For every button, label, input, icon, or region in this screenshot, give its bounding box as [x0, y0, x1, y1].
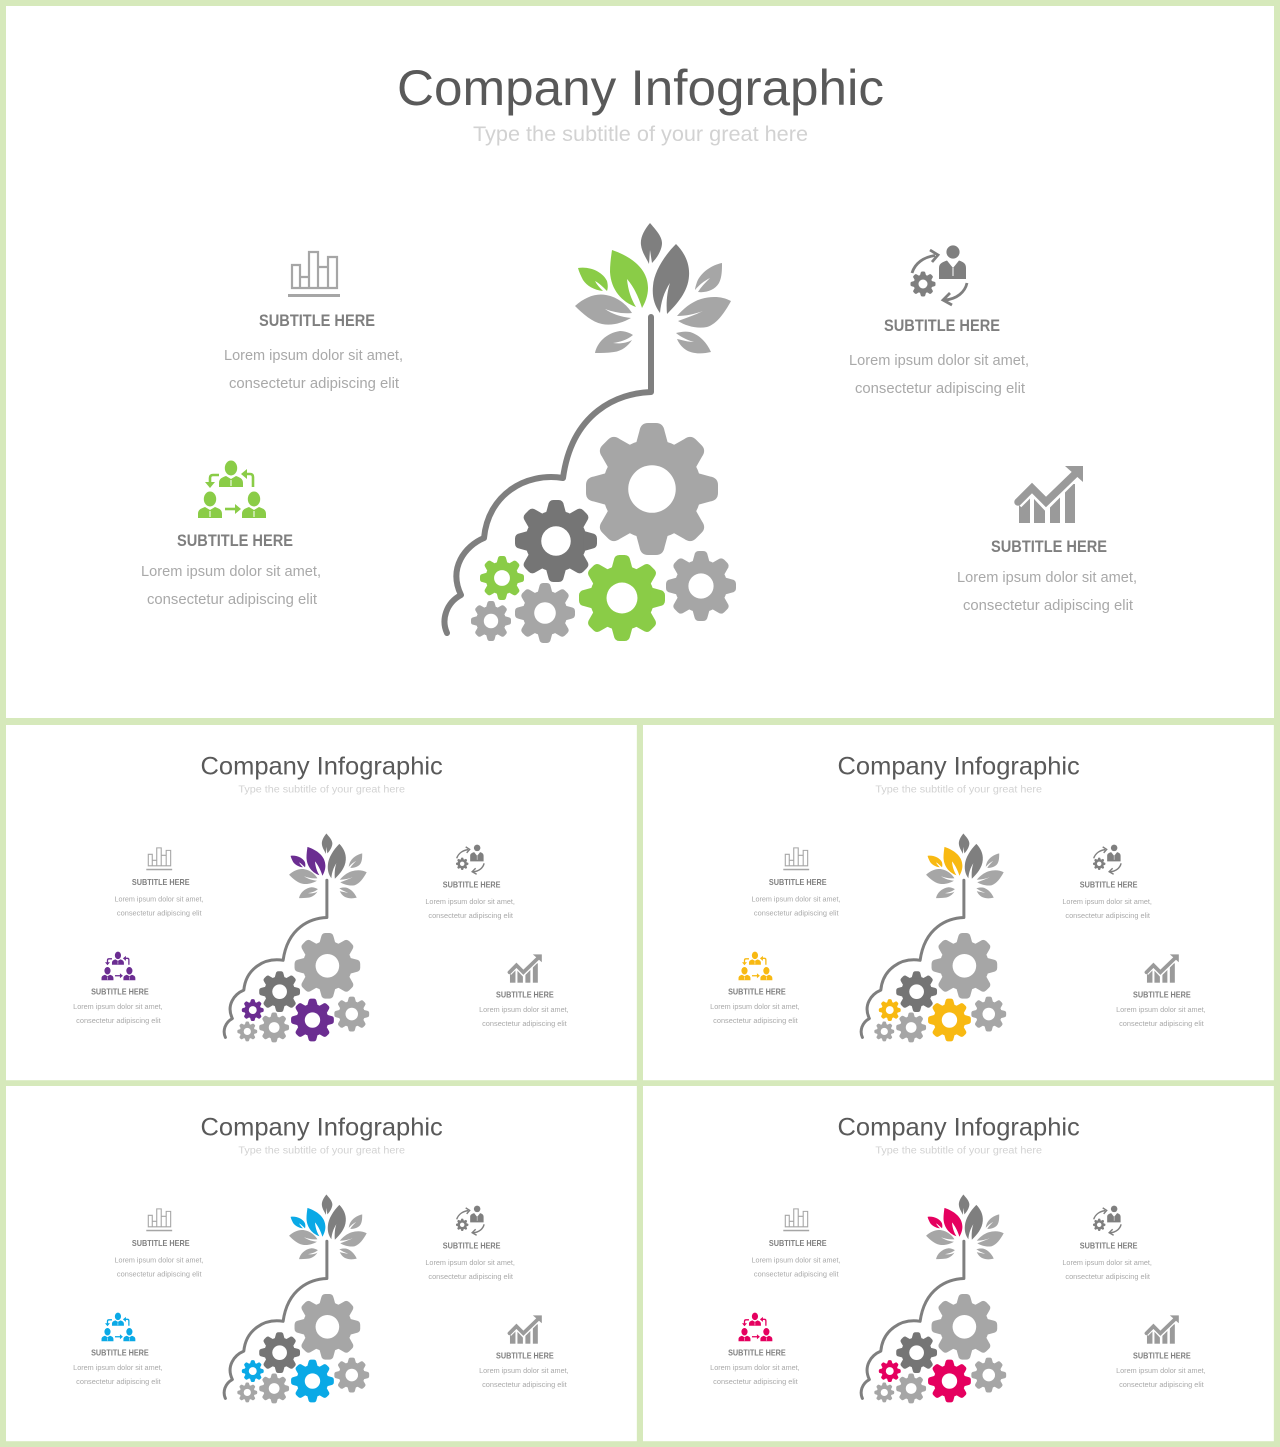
icon: team	[739, 1313, 772, 1341]
block: bottom right text	[479, 990, 569, 1028]
block: top left text	[114, 877, 204, 918]
icon: cycle with person and gear	[910, 245, 967, 305]
block: top right text: Lorem ipsum dolor sit amet,	[425, 1258, 515, 1267]
tree and gears illustration	[224, 1194, 369, 1403]
icon: team	[198, 460, 266, 518]
block: top right text	[1062, 1241, 1152, 1281]
subtitle: Type the subtitle of your great here	[238, 1146, 405, 1157]
subtitle: Type the subtitle of your great here	[238, 785, 405, 796]
panel: pink variant	[643, 1086, 1274, 1441]
block: bottom left text	[73, 987, 163, 1025]
block: bottom left text: SUBTITLE HERE	[177, 531, 293, 550]
icon: cycle with person and gear	[1093, 845, 1121, 874]
block: bottom left text: consectetur adipiscing elit	[713, 1377, 798, 1386]
block: top left text	[751, 877, 841, 918]
block: top left text: SUBTITLE HERE	[132, 1238, 190, 1248]
panel: blue variant	[6, 1086, 637, 1441]
panel: purple variant	[6, 725, 637, 1080]
icon: team	[102, 1313, 135, 1341]
panel: yellow variant	[643, 725, 1274, 1080]
icon: team	[739, 952, 772, 980]
block: bottom left text: SUBTITLE HERE	[91, 987, 149, 997]
block: top left text	[224, 311, 403, 392]
block: top left text: Lorem ipsum dolor sit amet,	[114, 895, 204, 904]
icon: growth chart	[509, 1315, 542, 1344]
block: top left text: consectetur adipiscing elit	[229, 376, 399, 392]
block: bottom left text: Lorem ipsum dolor sit amet,	[73, 1363, 163, 1372]
title: Company Infographic	[397, 60, 884, 116]
tree and gears illustration	[224, 833, 369, 1042]
icon: cycle with person and gear	[1093, 1206, 1121, 1235]
subtitle: Type the subtitle of your great here	[875, 785, 1042, 796]
block: top right text: Lorem ipsum dolor sit amet,	[425, 897, 515, 906]
block: top left text: Lorem ipsum dolor sit amet,	[114, 1256, 204, 1265]
block: bottom left text	[710, 987, 800, 1025]
block: top left text: consectetur adipiscing elit	[754, 1270, 839, 1279]
block: top right text: Lorem ipsum dolor sit amet,	[1062, 1258, 1152, 1267]
block: top right text: SUBTITLE HERE	[1080, 880, 1138, 890]
block: bottom left text: Lorem ipsum dolor sit amet,	[73, 1002, 163, 1011]
block: bottom right text	[1116, 990, 1206, 1028]
block: top left text: Lorem ipsum dolor sit amet,	[751, 895, 841, 904]
block: top right text: SUBTITLE HERE	[443, 1241, 501, 1251]
block: bottom right text: consectetur adipiscing elit	[482, 1380, 567, 1389]
panel: main slide	[6, 6, 1274, 718]
block: top right text: consectetur adipiscing elit	[855, 381, 1025, 397]
block: top left text	[751, 1238, 841, 1279]
icon: growth chart	[509, 954, 542, 983]
block: top right text	[849, 316, 1029, 397]
block: bottom right text: consectetur adipiscing elit	[963, 598, 1133, 614]
block: top right text	[425, 1241, 515, 1281]
subtitle: Type the subtitle of your great here	[473, 123, 808, 146]
block: bottom right text: SUBTITLE HERE	[496, 1351, 554, 1361]
block: bottom left text	[710, 1348, 800, 1386]
block: top left text: consectetur adipiscing elit	[117, 909, 202, 918]
block: bottom right text: Lorem ipsum dolor sit amet,	[479, 1366, 569, 1375]
block: bottom left text: Lorem ipsum dolor sit amet,	[710, 1363, 800, 1372]
block: top left text: SUBTITLE HERE	[769, 877, 827, 887]
title: Company Infographic	[201, 753, 443, 781]
block: top right text: consectetur adipiscing elit	[428, 1272, 513, 1281]
title: Company Infographic	[838, 753, 1080, 781]
block: bottom left text: consectetur adipiscing elit	[147, 592, 317, 608]
block: bottom right text: SUBTITLE HERE	[991, 537, 1107, 556]
block: top right text: SUBTITLE HERE	[443, 880, 501, 890]
block: bottom left text: Lorem ipsum dolor sit amet,	[141, 564, 321, 580]
block: top right text	[425, 880, 515, 920]
block: top right text: SUBTITLE HERE	[884, 316, 1000, 335]
title: Company Infographic	[201, 1114, 443, 1142]
icon: growth chart	[1146, 1315, 1179, 1344]
block: bottom right text: SUBTITLE HERE	[1133, 1351, 1191, 1361]
block: top right text: Lorem ipsum dolor sit amet,	[1062, 897, 1152, 906]
block: bottom right text: consectetur adipiscing elit	[1119, 1019, 1204, 1028]
block: top left text: consectetur adipiscing elit	[117, 1270, 202, 1279]
icon: cycle with person and gear	[456, 845, 484, 874]
block: bottom right text: Lorem ipsum dolor sit amet,	[1116, 1005, 1206, 1014]
title: Company Infographic	[838, 1114, 1080, 1142]
block: bottom left text: SUBTITLE HERE	[728, 987, 786, 997]
block: bottom right text	[957, 537, 1137, 614]
block: bottom right text: SUBTITLE HERE	[1133, 990, 1191, 1000]
block: bottom right text	[479, 1351, 569, 1389]
block: top right text: Lorem ipsum dolor sit amet,	[849, 353, 1029, 369]
block: bottom right text: Lorem ipsum dolor sit amet,	[1116, 1366, 1206, 1375]
block: bottom left text: consectetur adipiscing elit	[713, 1016, 798, 1025]
block: top left text: SUBTITLE HERE	[769, 1238, 827, 1248]
block: bottom left text	[73, 1348, 163, 1386]
tree and gears illustration	[861, 1194, 1006, 1403]
block: bottom right text	[1116, 1351, 1206, 1389]
block: top right text	[1062, 880, 1152, 920]
block: top left text: SUBTITLE HERE	[259, 311, 375, 330]
block: top right text: consectetur adipiscing elit	[428, 911, 513, 920]
block: bottom right text: Lorem ipsum dolor sit amet,	[957, 570, 1137, 586]
icon: growth chart	[1146, 954, 1179, 983]
block: top left text: consectetur adipiscing elit	[754, 909, 839, 918]
block: top right text: consectetur adipiscing elit	[1065, 911, 1150, 920]
block: bottom left text: Lorem ipsum dolor sit amet,	[710, 1002, 800, 1011]
tree and gears illustration	[445, 223, 736, 643]
block: bottom right text: SUBTITLE HERE	[496, 990, 554, 1000]
icon: growth chart	[1017, 466, 1083, 523]
icon: bar chart	[146, 1209, 172, 1231]
block: bottom left text: SUBTITLE HERE	[728, 1348, 786, 1358]
block: bottom right text: consectetur adipiscing elit	[482, 1019, 567, 1028]
block: bottom left text: SUBTITLE HERE	[91, 1348, 149, 1358]
icon: team	[102, 952, 135, 980]
icon: cycle with person and gear	[456, 1206, 484, 1235]
block: top right text: consectetur adipiscing elit	[1065, 1272, 1150, 1281]
block: bottom right text: Lorem ipsum dolor sit amet,	[479, 1005, 569, 1014]
block: top left text: Lorem ipsum dolor sit amet,	[751, 1256, 841, 1265]
icon: bar chart	[288, 252, 340, 297]
icon: bar chart	[783, 848, 809, 870]
block: bottom left text: consectetur adipiscing elit	[76, 1016, 161, 1025]
subtitle: Type the subtitle of your great here	[875, 1146, 1042, 1157]
block: bottom left text: consectetur adipiscing elit	[76, 1377, 161, 1386]
block: bottom left text	[141, 531, 321, 608]
icon: bar chart	[783, 1209, 809, 1231]
block: bottom right text: consectetur adipiscing elit	[1119, 1380, 1204, 1389]
block: top right text: SUBTITLE HERE	[1080, 1241, 1138, 1251]
block: top left text	[114, 1238, 204, 1279]
block: top left text: SUBTITLE HERE	[132, 877, 190, 887]
icon: bar chart	[146, 848, 172, 870]
tree and gears illustration	[861, 833, 1006, 1042]
block: top left text: Lorem ipsum dolor sit amet,	[224, 348, 403, 364]
